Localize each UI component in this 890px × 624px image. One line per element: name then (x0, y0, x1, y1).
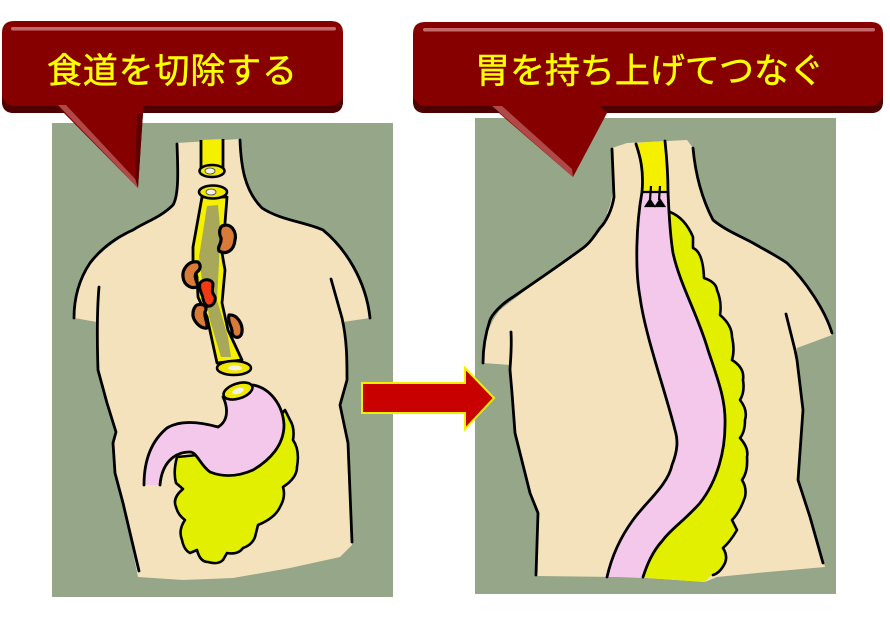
omentum layer (640, 212, 747, 582)
esophagus remnant (636, 141, 668, 192)
body silhouette (483, 140, 832, 582)
tumor (200, 280, 215, 306)
stomach (144, 385, 284, 485)
lymph nodes (183, 225, 242, 337)
heading: 食道を切除する (47, 52, 297, 91)
body silhouette (74, 139, 370, 580)
body outlines (74, 140, 370, 571)
upper esophagus stump (200, 139, 224, 177)
panel: after surgery (475, 118, 836, 594)
sutures (641, 186, 669, 206)
heading: 胃を持ち上げてつなぐ (475, 52, 824, 91)
panel: before surgery (52, 123, 393, 597)
body outlines (483, 148, 832, 575)
stomach tube (607, 192, 725, 577)
esophagus outlines (636, 141, 668, 192)
resected esophagus segment (193, 186, 251, 375)
omentum (175, 410, 298, 563)
arrow (362, 368, 494, 429)
callout: right (413, 22, 883, 177)
callout: left (2, 21, 343, 188)
lower esophagus stump (221, 379, 255, 403)
